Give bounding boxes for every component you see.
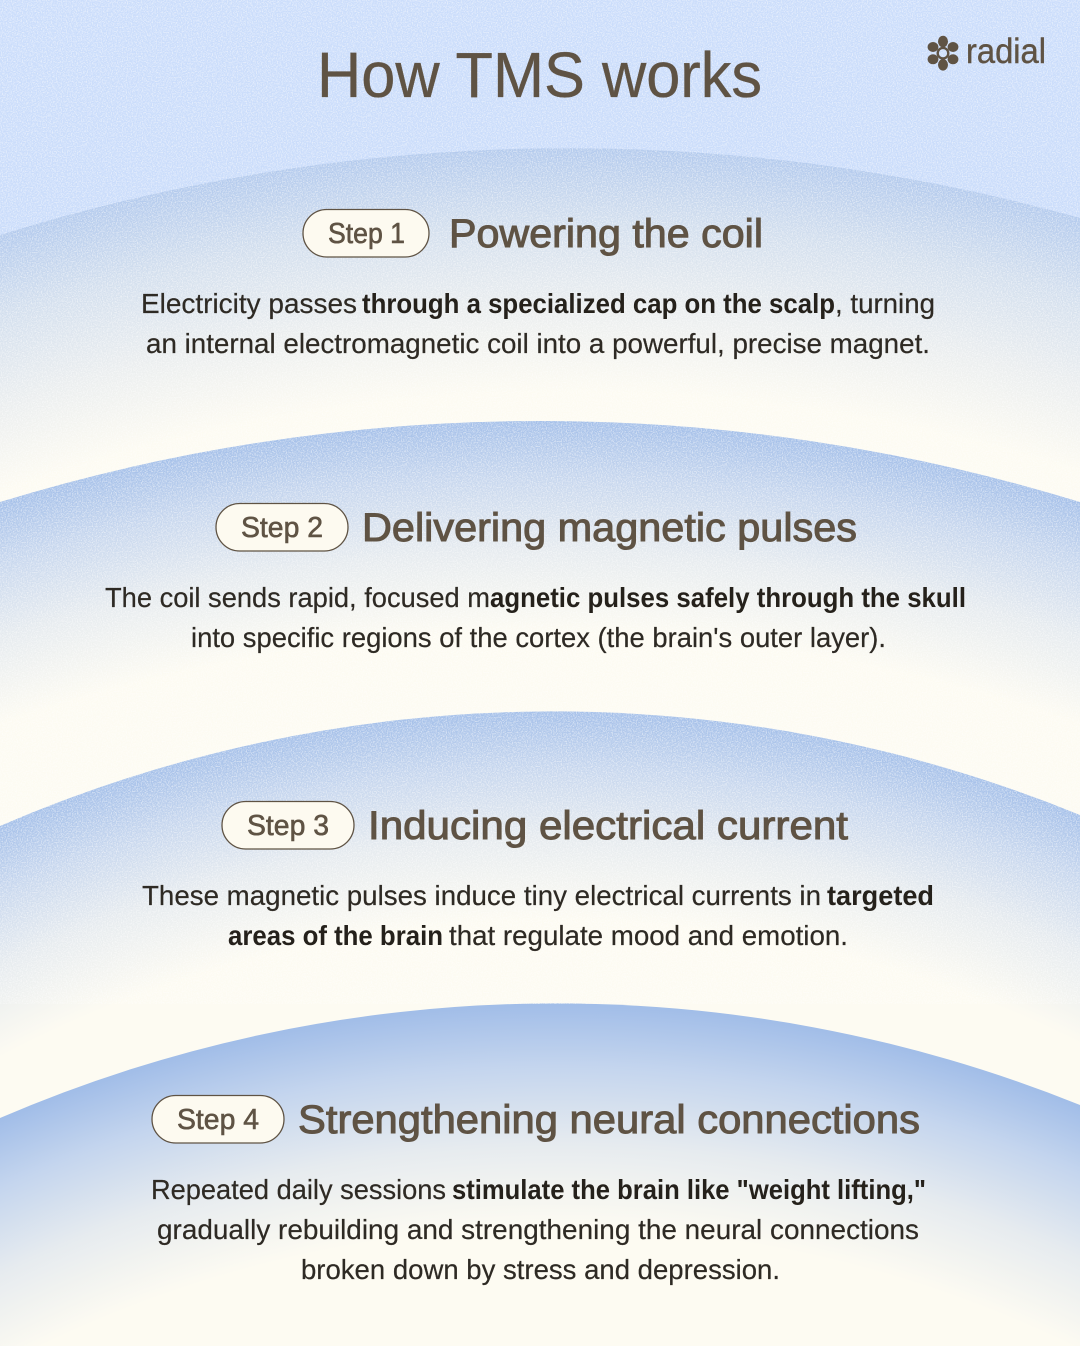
step 1 header [303, 210, 763, 257]
step 3 heading: Inducing electrical current [368, 804, 848, 848]
step 4 body text: gradually rebuilding and strengthening the neural connections [157, 1214, 919, 1245]
step 3 pill [222, 802, 354, 849]
step 1 pill: Step 1 [328, 218, 405, 250]
step 1 body text: , turning [835, 288, 935, 319]
step 1 body text [141, 288, 935, 359]
step 4 heading: Strengthening neural connections [298, 1098, 920, 1142]
step 1 body text: an internal electromagnetic coil into a powerful, precise magnet. [146, 328, 930, 359]
step 1 pill [303, 210, 429, 257]
step 3 pill: Step 3 [247, 810, 329, 842]
step 2 pill [216, 504, 348, 551]
arc band: step 3 [0, 711, 1080, 1346]
arc band: step 2 [0, 421, 1080, 1346]
step 2 body text: into specific regions of the cortex (the brain's outer layer). [191, 622, 886, 653]
step 2 heading: Delivering magnetic pulses [362, 506, 857, 550]
step 1 body text: through a specialized cap on the scalp [362, 288, 835, 319]
step 4 body text: stimulate the brain like "weight lifting," [452, 1174, 926, 1205]
step 4 pill [152, 1096, 284, 1143]
icon: flower logo mark [928, 36, 958, 71]
step 3 body text: areas of the brain [228, 920, 443, 951]
step 1 heading: Powering the coil [449, 212, 763, 256]
arc band: step 4 [0, 1003, 1080, 1346]
step 3 body text: that regulate mood and emotion. [449, 920, 848, 951]
title: How TMS works [317, 39, 762, 111]
step 2 body text: agnetic pulses safely through the skull [490, 582, 966, 613]
logo: radial [928, 32, 1046, 71]
step 4 body text: Repeated daily sessions [151, 1174, 446, 1205]
step 3 header [222, 802, 848, 849]
step 2 pill: Step 2 [241, 512, 323, 544]
step 2 body text: The coil sends rapid, focused m [105, 582, 490, 613]
step 4 pill: Step 4 [177, 1104, 259, 1136]
step 3 body text [142, 880, 934, 951]
logo wordmark: radial [966, 32, 1046, 71]
step 2 header [216, 504, 857, 551]
step 3 body text: targeted [827, 880, 934, 911]
step 1 body text: Electricity passes [141, 288, 357, 319]
step 4 body text [151, 1174, 926, 1285]
step 4 header [152, 1096, 920, 1143]
step 4 body text: broken down by stress and depression. [301, 1254, 780, 1285]
step 2 body text [105, 582, 966, 653]
step 3 body text: These magnetic pulses induce tiny electrical currents in [142, 880, 821, 911]
